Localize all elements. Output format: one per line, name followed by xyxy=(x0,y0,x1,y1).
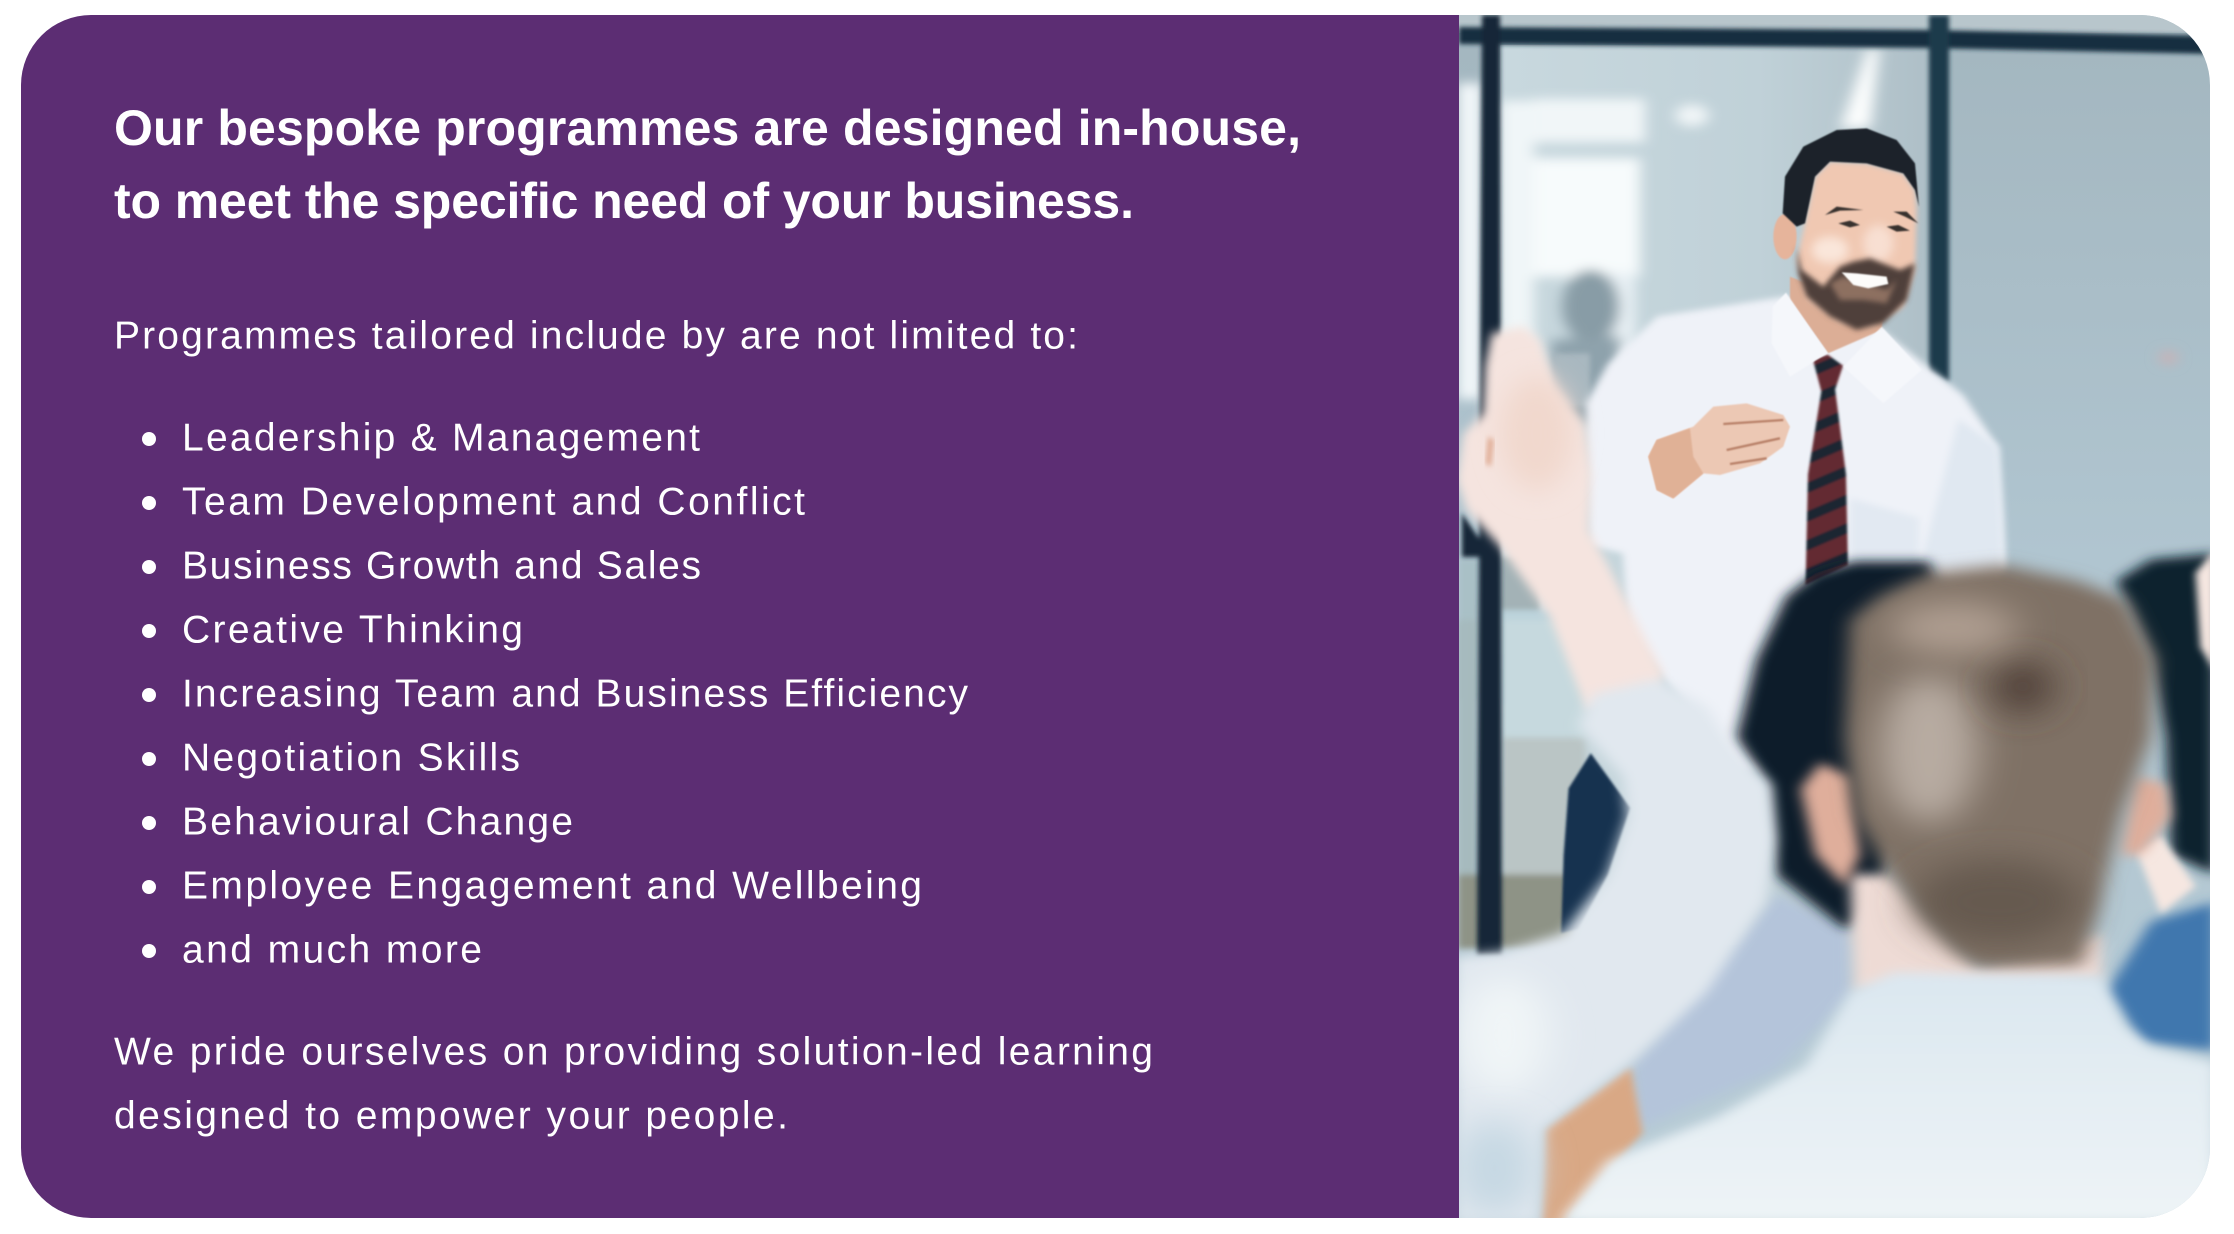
ears xyxy=(1801,763,2171,886)
pointing hand xyxy=(1648,403,1790,498)
shirt xyxy=(1586,296,2005,771)
panel: purple text card xyxy=(21,15,1459,1218)
closing text: designed to empower your people. xyxy=(114,1094,788,1138)
dark hair woman xyxy=(1736,561,1954,929)
hair shading xyxy=(1880,675,1978,824)
heading: to meet the specific need of your business. xyxy=(114,173,1134,229)
bare arm xyxy=(1541,1066,1643,1223)
chin skin xyxy=(1830,277,1897,303)
list item: more: and much more xyxy=(182,928,482,972)
neck xyxy=(1850,874,2102,992)
list item: Employee: Employee Engagement and Wellbeing xyxy=(182,864,922,908)
woman shirt xyxy=(1742,902,1844,945)
list item: Team: Team Development and Conflict xyxy=(182,480,805,524)
eyes and brows xyxy=(1825,207,1918,232)
intro text: Programmes tailored include by are not limited to: xyxy=(114,314,1078,358)
hair xyxy=(1783,128,1919,227)
tie xyxy=(1806,355,1848,585)
blue shirt xyxy=(2107,902,2215,1051)
beard xyxy=(1797,247,1915,330)
list item: Business: Business Growth and Sales xyxy=(182,544,701,588)
hand behind xyxy=(2136,550,2215,914)
photo: presenter and audience xyxy=(1455,15,2215,1225)
list item: Negotiation: Negotiation Skills xyxy=(182,736,520,780)
closing text xyxy=(114,1030,1153,1138)
face xyxy=(1797,162,1917,327)
neck xyxy=(1790,277,1883,353)
window frame bars xyxy=(1459,15,2215,955)
collar xyxy=(1778,292,1912,368)
closing text: We pride ourselves on providing solution-led learning xyxy=(114,1030,1153,1074)
back of head xyxy=(1845,565,2156,968)
heading xyxy=(114,100,1301,229)
raised hand foreground xyxy=(1457,327,1663,710)
navy trousers xyxy=(1561,753,1630,933)
heading: Our bespoke programmes are designed in-house, xyxy=(114,100,1301,156)
list item: Creative: Creative Thinking xyxy=(182,608,523,652)
front shirt xyxy=(1559,972,2215,1223)
list item: Leadership: Leadership & Management xyxy=(182,416,700,460)
bullet list xyxy=(142,416,968,972)
smile xyxy=(1842,272,1888,288)
list item: Increasing: Increasing Team and Business Efficiency xyxy=(182,672,968,716)
raised arm sleeve xyxy=(1455,679,1776,1223)
lower background xyxy=(1462,352,1591,619)
dark hair right xyxy=(2116,553,2215,874)
office window background xyxy=(1458,15,2215,1225)
audience xyxy=(1455,550,2215,1223)
ear xyxy=(1773,214,1797,259)
list item: Behavioural: Behavioural Change xyxy=(182,800,573,844)
presenter xyxy=(1586,128,2005,771)
head and collar xyxy=(1772,128,1922,403)
